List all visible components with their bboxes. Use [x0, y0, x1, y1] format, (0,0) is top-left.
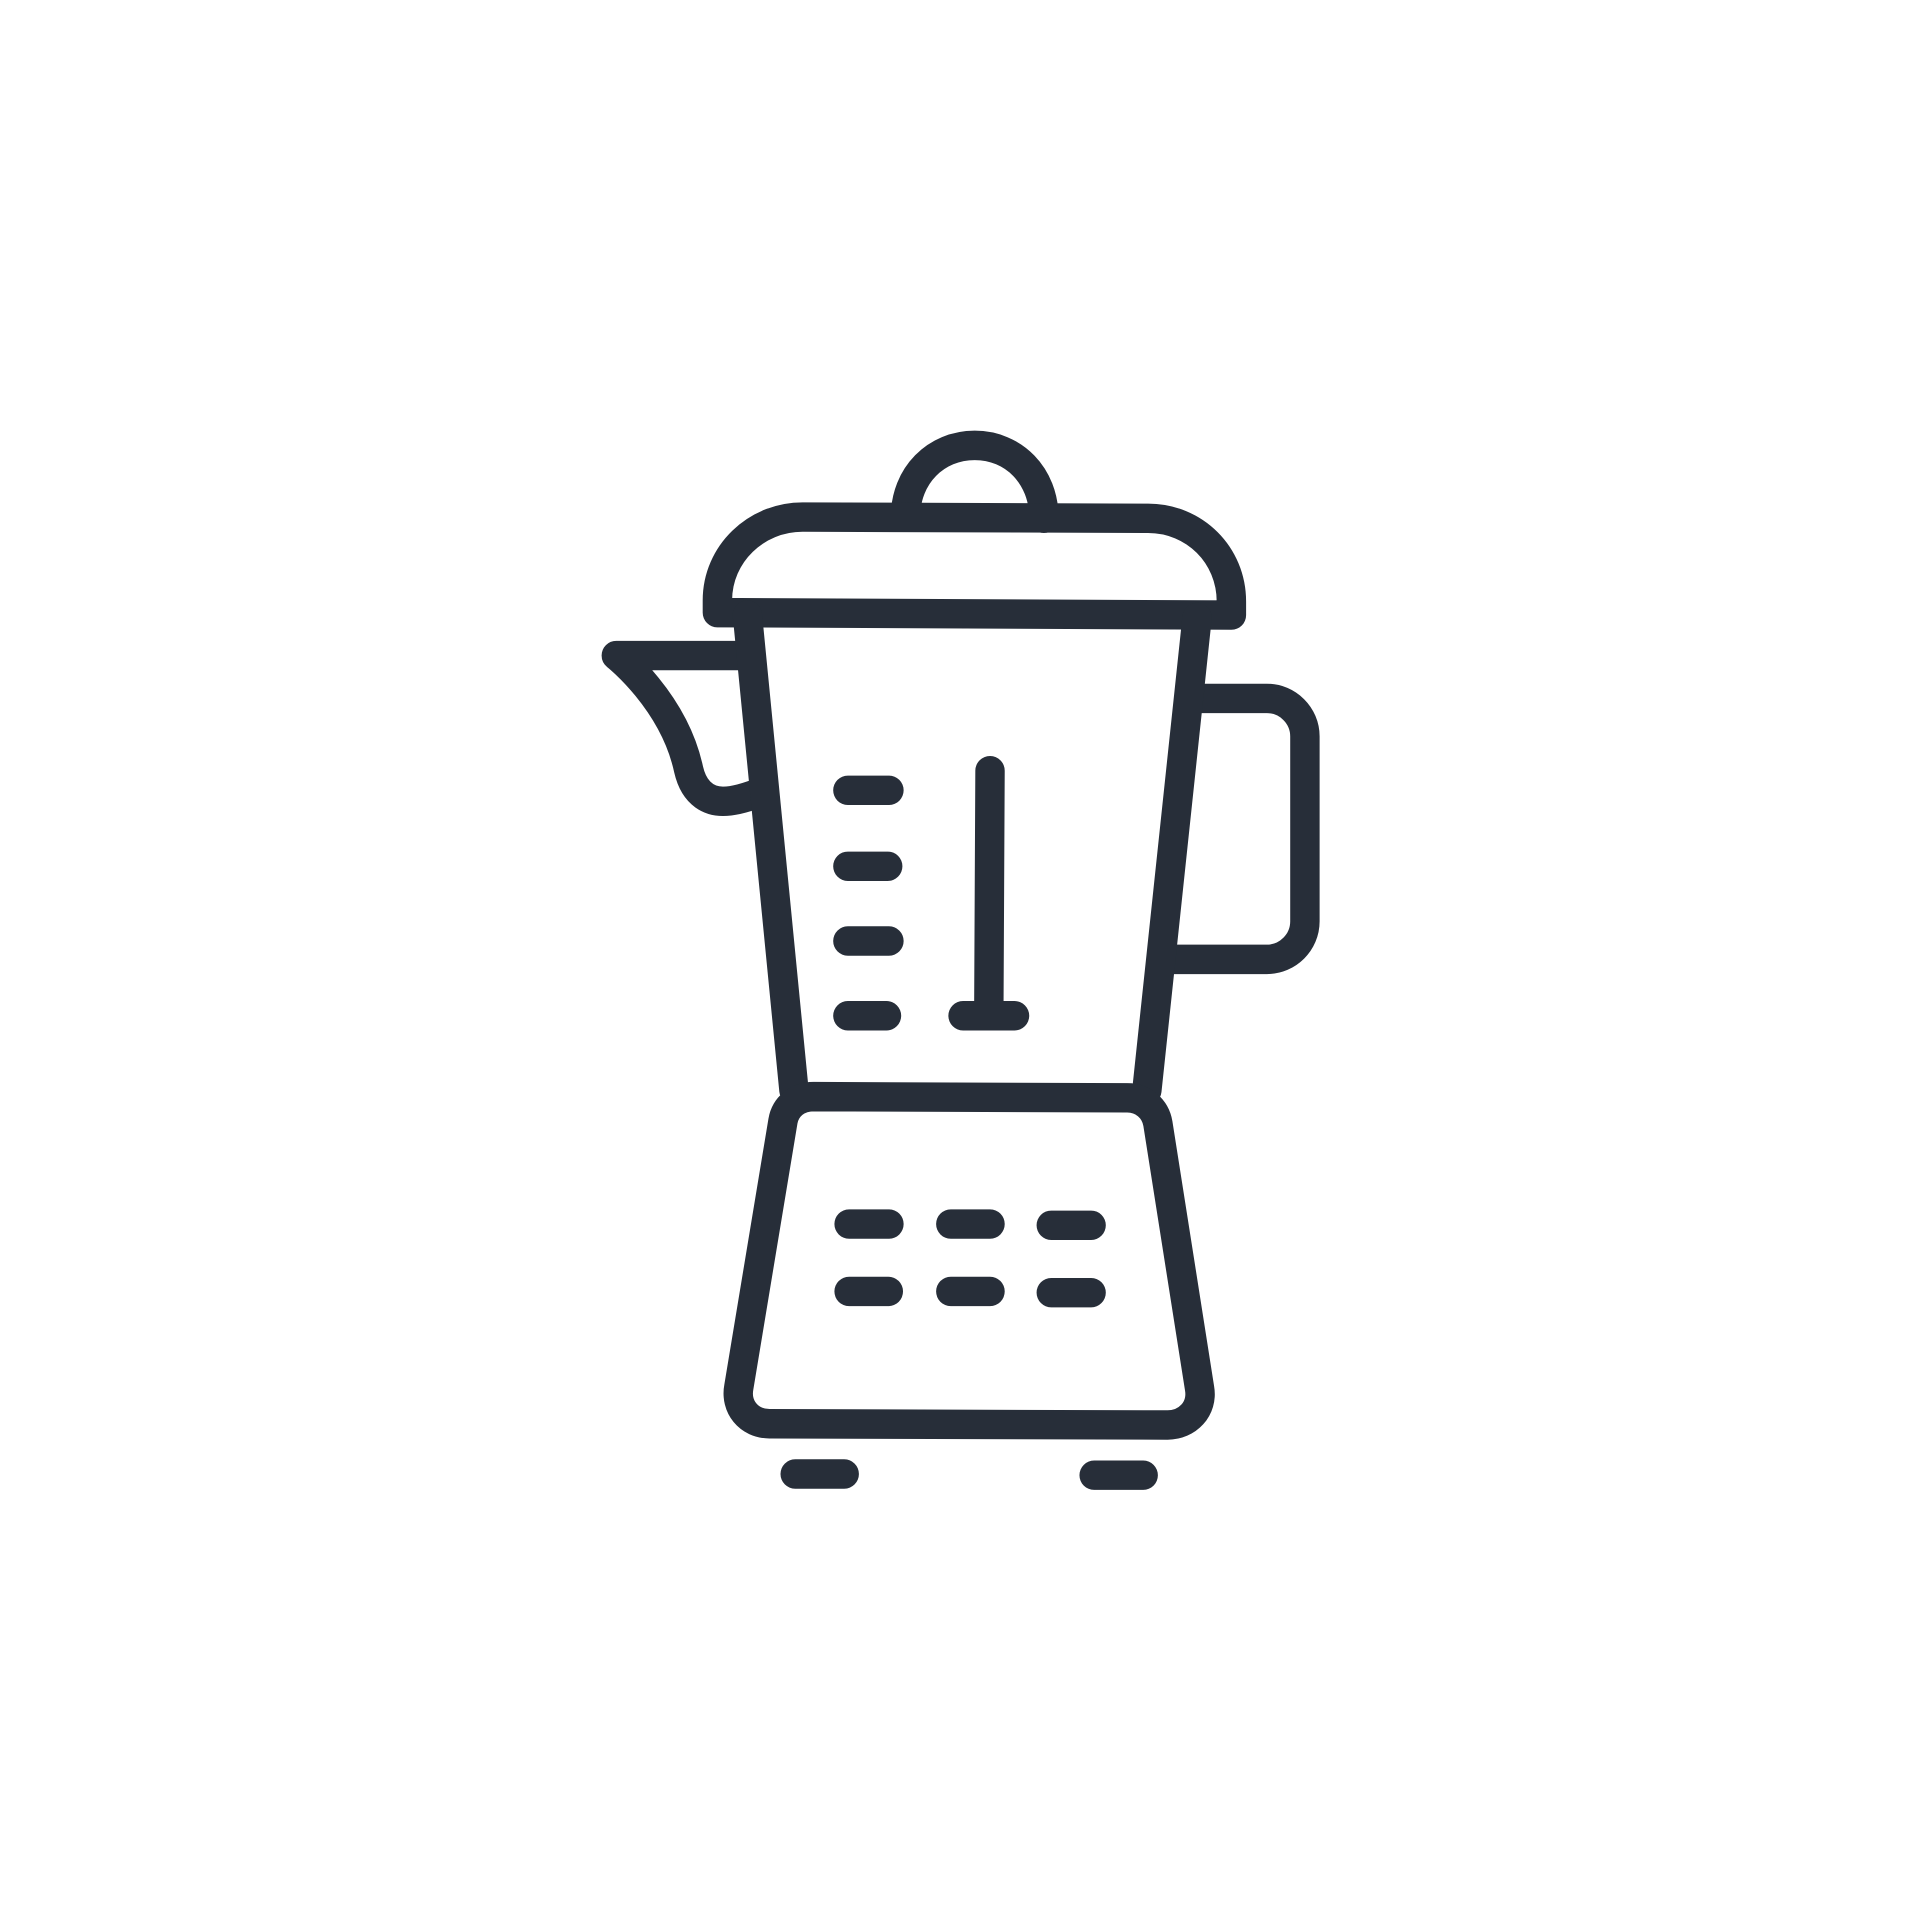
motor base [738, 1097, 1200, 1425]
feet [795, 1474, 1143, 1475]
jar body [747, 615, 1197, 1090]
lid [717, 517, 1231, 615]
control buttons [849, 1224, 1091, 1293]
handle [1164, 698, 1305, 959]
lid knob [905, 445, 1044, 518]
blade shaft [963, 771, 1015, 1016]
spout [616, 656, 762, 801]
measurement marks [848, 790, 889, 1016]
